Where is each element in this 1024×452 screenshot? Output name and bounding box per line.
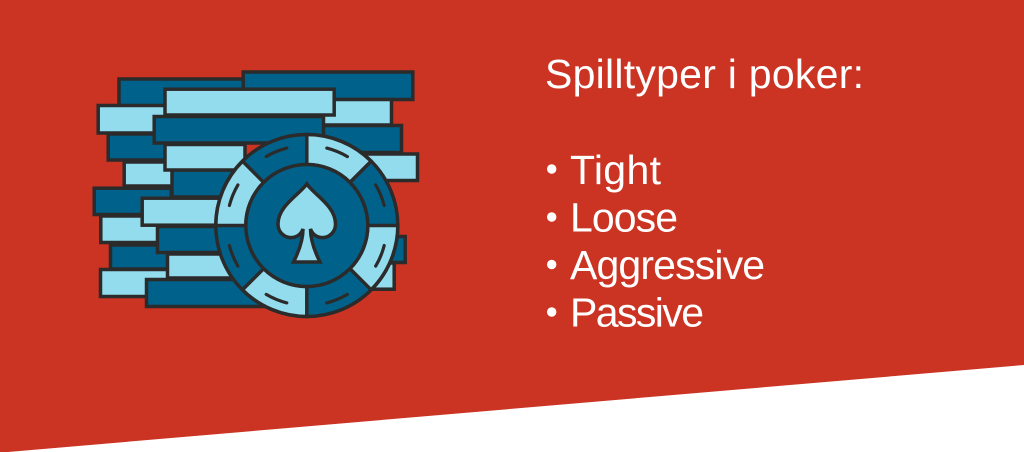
- chip rim: [216, 134, 398, 316]
- chip light segments: [216, 134, 398, 316]
- heading: Spilltyper i poker:: [545, 51, 864, 97]
- item: Loose: Loose: [570, 195, 678, 241]
- icon: poker chips stack: [94, 72, 417, 316]
- item: Aggressive: Aggressive: [570, 242, 765, 288]
- bullet list: [547, 147, 765, 336]
- item: Passive: Passive: [570, 290, 704, 336]
- white diagonal footer: [8, 365, 1024, 452]
- chip edge dashes: [229, 148, 384, 303]
- chip: [216, 134, 398, 316]
- chip centre: [246, 164, 368, 286]
- item: Tight: Tight: [570, 147, 662, 193]
- back chips: [94, 72, 417, 306]
- icon: spade: [278, 184, 336, 262]
